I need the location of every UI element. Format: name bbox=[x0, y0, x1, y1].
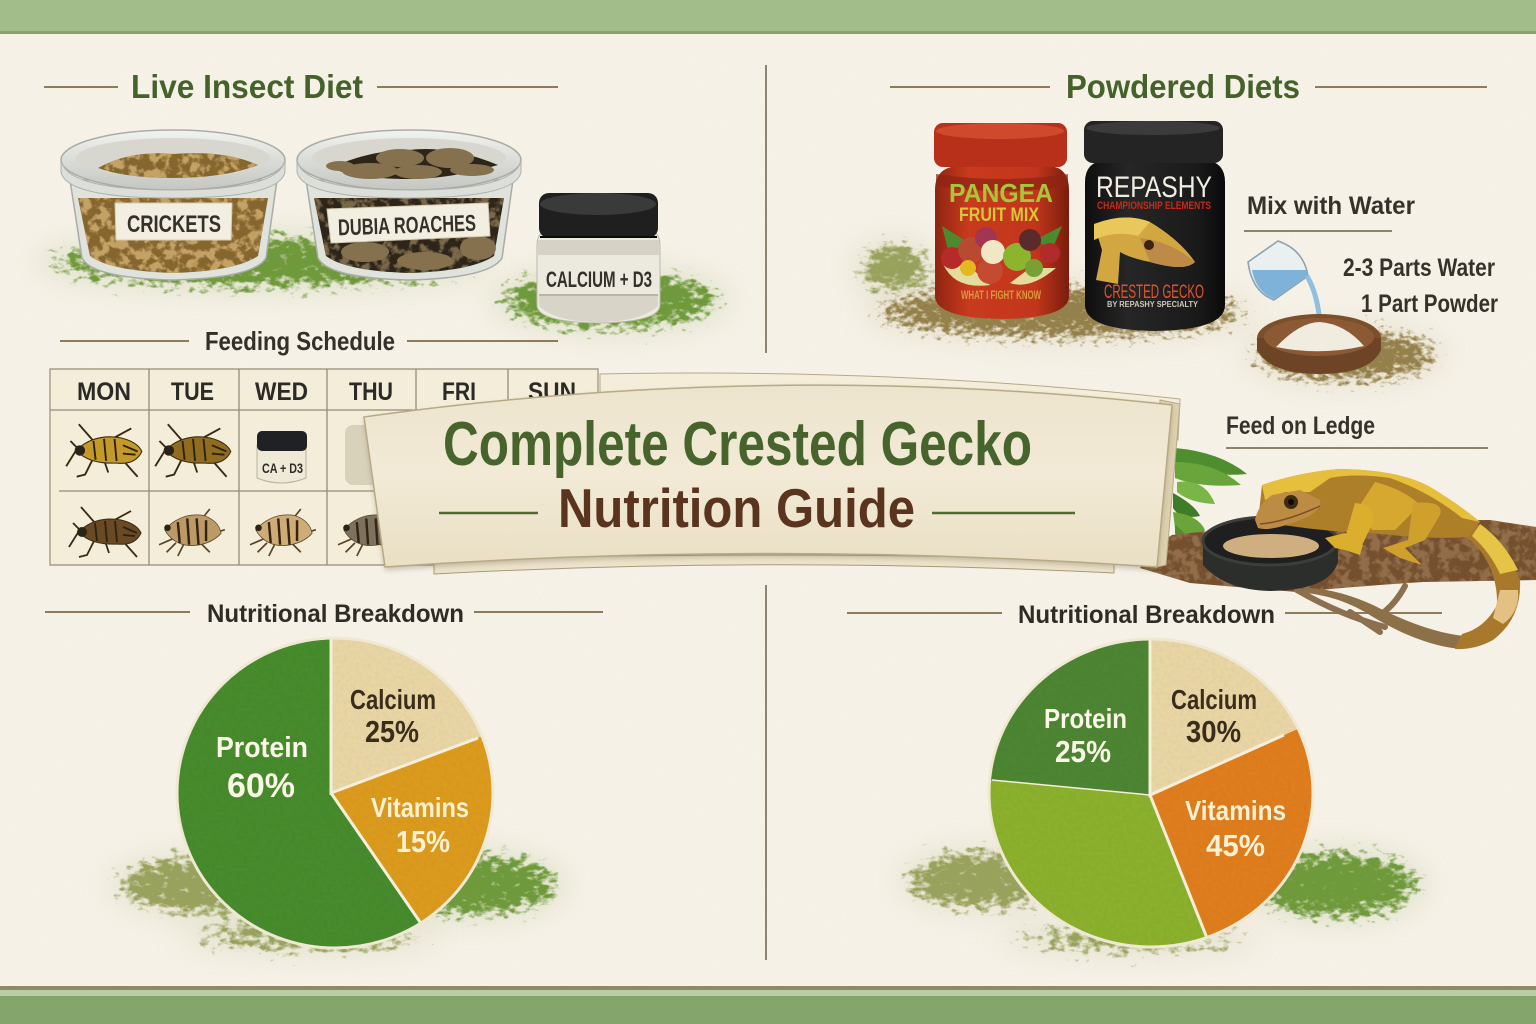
labels bbox=[216, 684, 469, 859]
leaves bbox=[1173, 448, 1247, 552]
icon: pouring water into bowl bbox=[1248, 241, 1381, 374]
day headers bbox=[77, 378, 576, 406]
grass under right pie bbox=[900, 848, 1425, 954]
heading: left nutritional breakdown: Nutritional Breakdown bbox=[207, 600, 464, 628]
legs bbox=[1345, 503, 1373, 545]
heading: Powdered Diets: Powdered Diets bbox=[1066, 68, 1300, 105]
feeding bowl bbox=[1203, 517, 1338, 591]
day headers: TUE bbox=[171, 378, 214, 406]
jar: Repashy crested gecko bbox=[1084, 121, 1225, 331]
pie chart: insect diet bbox=[176, 636, 494, 950]
labels: 25% bbox=[365, 714, 419, 749]
text: mixing ratio bbox=[1343, 254, 1498, 318]
grass under insect containers bbox=[37, 234, 728, 332]
labels: Calcium bbox=[1171, 684, 1257, 715]
title text: Complete Crested Gecko bbox=[443, 410, 1032, 479]
labels: 15% bbox=[396, 824, 450, 859]
banner back layers bbox=[600, 373, 1180, 440]
branch bbox=[1140, 520, 1536, 592]
day headers: SUN bbox=[528, 378, 576, 406]
jar: calcium + D3: CALCIUM + D3 bbox=[546, 267, 652, 292]
label: dubia roaches: DUBIA ROACHES bbox=[338, 210, 476, 240]
label: crickets: CRICKETS bbox=[127, 211, 221, 238]
heading: Feeding Schedule: Feeding Schedule bbox=[205, 326, 395, 356]
Repashy label text bbox=[1096, 171, 1212, 309]
label: dubia roaches bbox=[327, 203, 490, 243]
top green band bbox=[0, 0, 1536, 34]
labels: 25% bbox=[1055, 734, 1111, 769]
labels: Vitamins bbox=[1185, 795, 1286, 826]
body and crest bbox=[1258, 469, 1480, 538]
label: crickets bbox=[115, 203, 232, 240]
day headers: THU bbox=[349, 378, 393, 406]
heading: right nutritional breakdown: Nutritional Breakdown bbox=[1018, 601, 1275, 629]
labels: 45% bbox=[1206, 828, 1265, 863]
schedule icons: row 1: CA + D3 bbox=[262, 460, 303, 476]
fruit illustration bbox=[941, 226, 1062, 286]
day headers: FRI bbox=[442, 378, 476, 406]
grass under powder jars bbox=[853, 240, 1445, 385]
schedule icons: row 1 bbox=[66, 424, 395, 485]
labels: Calcium bbox=[350, 684, 436, 715]
Repashy label text: BY REPASHY SPECIALTY bbox=[1107, 300, 1199, 309]
tail thin bbox=[1297, 588, 1464, 649]
tail bbox=[1455, 520, 1520, 649]
text: Mix with Water: Mix with Water bbox=[1247, 192, 1415, 220]
Repashy label text: CRESTED GECKO bbox=[1104, 282, 1204, 303]
day headers: MON bbox=[77, 378, 131, 406]
jar: calcium + D3 bbox=[537, 193, 660, 323]
day headers: WED bbox=[255, 378, 308, 406]
Pangea label text: PANGEA bbox=[949, 178, 1053, 208]
labels: Protein bbox=[1044, 703, 1127, 734]
schedule icons: row 2 bbox=[69, 507, 404, 557]
feeding schedule table bbox=[50, 369, 598, 565]
container: dubia roaches bbox=[297, 130, 521, 280]
labels: Vitamins bbox=[371, 792, 469, 823]
labels: Protein bbox=[216, 732, 308, 764]
labels: 30% bbox=[1186, 714, 1241, 749]
text: mixing ratio: 2-3 Parts Water bbox=[1343, 254, 1495, 282]
head bbox=[1255, 490, 1320, 529]
gecko on label bbox=[1094, 217, 1195, 284]
title banner bbox=[364, 373, 1180, 574]
pie chart: powdered diet bbox=[988, 638, 1314, 948]
text: mixing ratio: 1 Part Powder bbox=[1361, 290, 1498, 318]
Repashy label text: REPASHY bbox=[1096, 171, 1212, 204]
Pangea label text bbox=[949, 178, 1053, 302]
Pangea label text: WHAT I FIGHT KNOW bbox=[961, 288, 1041, 302]
gecko on branch with feeding bowl bbox=[1140, 448, 1536, 649]
Pangea label text: FRUIT MIX bbox=[959, 205, 1039, 226]
container: crickets bbox=[61, 130, 285, 280]
Repashy label text: CHAMPIONSHIP ELEMENTS bbox=[1097, 200, 1211, 212]
jar: Pangea fruit mix bbox=[934, 123, 1069, 319]
bottom green band bbox=[0, 986, 1536, 1024]
labels: 60% bbox=[227, 767, 295, 805]
grass under left pie bbox=[110, 851, 565, 953]
heading: Live Insect Diet: Live Insect Diet bbox=[131, 68, 363, 105]
labels bbox=[1044, 684, 1286, 863]
subtitle text: Nutrition Guide bbox=[558, 477, 915, 539]
text: Feed on Ledge: Feed on Ledge bbox=[1226, 412, 1375, 440]
